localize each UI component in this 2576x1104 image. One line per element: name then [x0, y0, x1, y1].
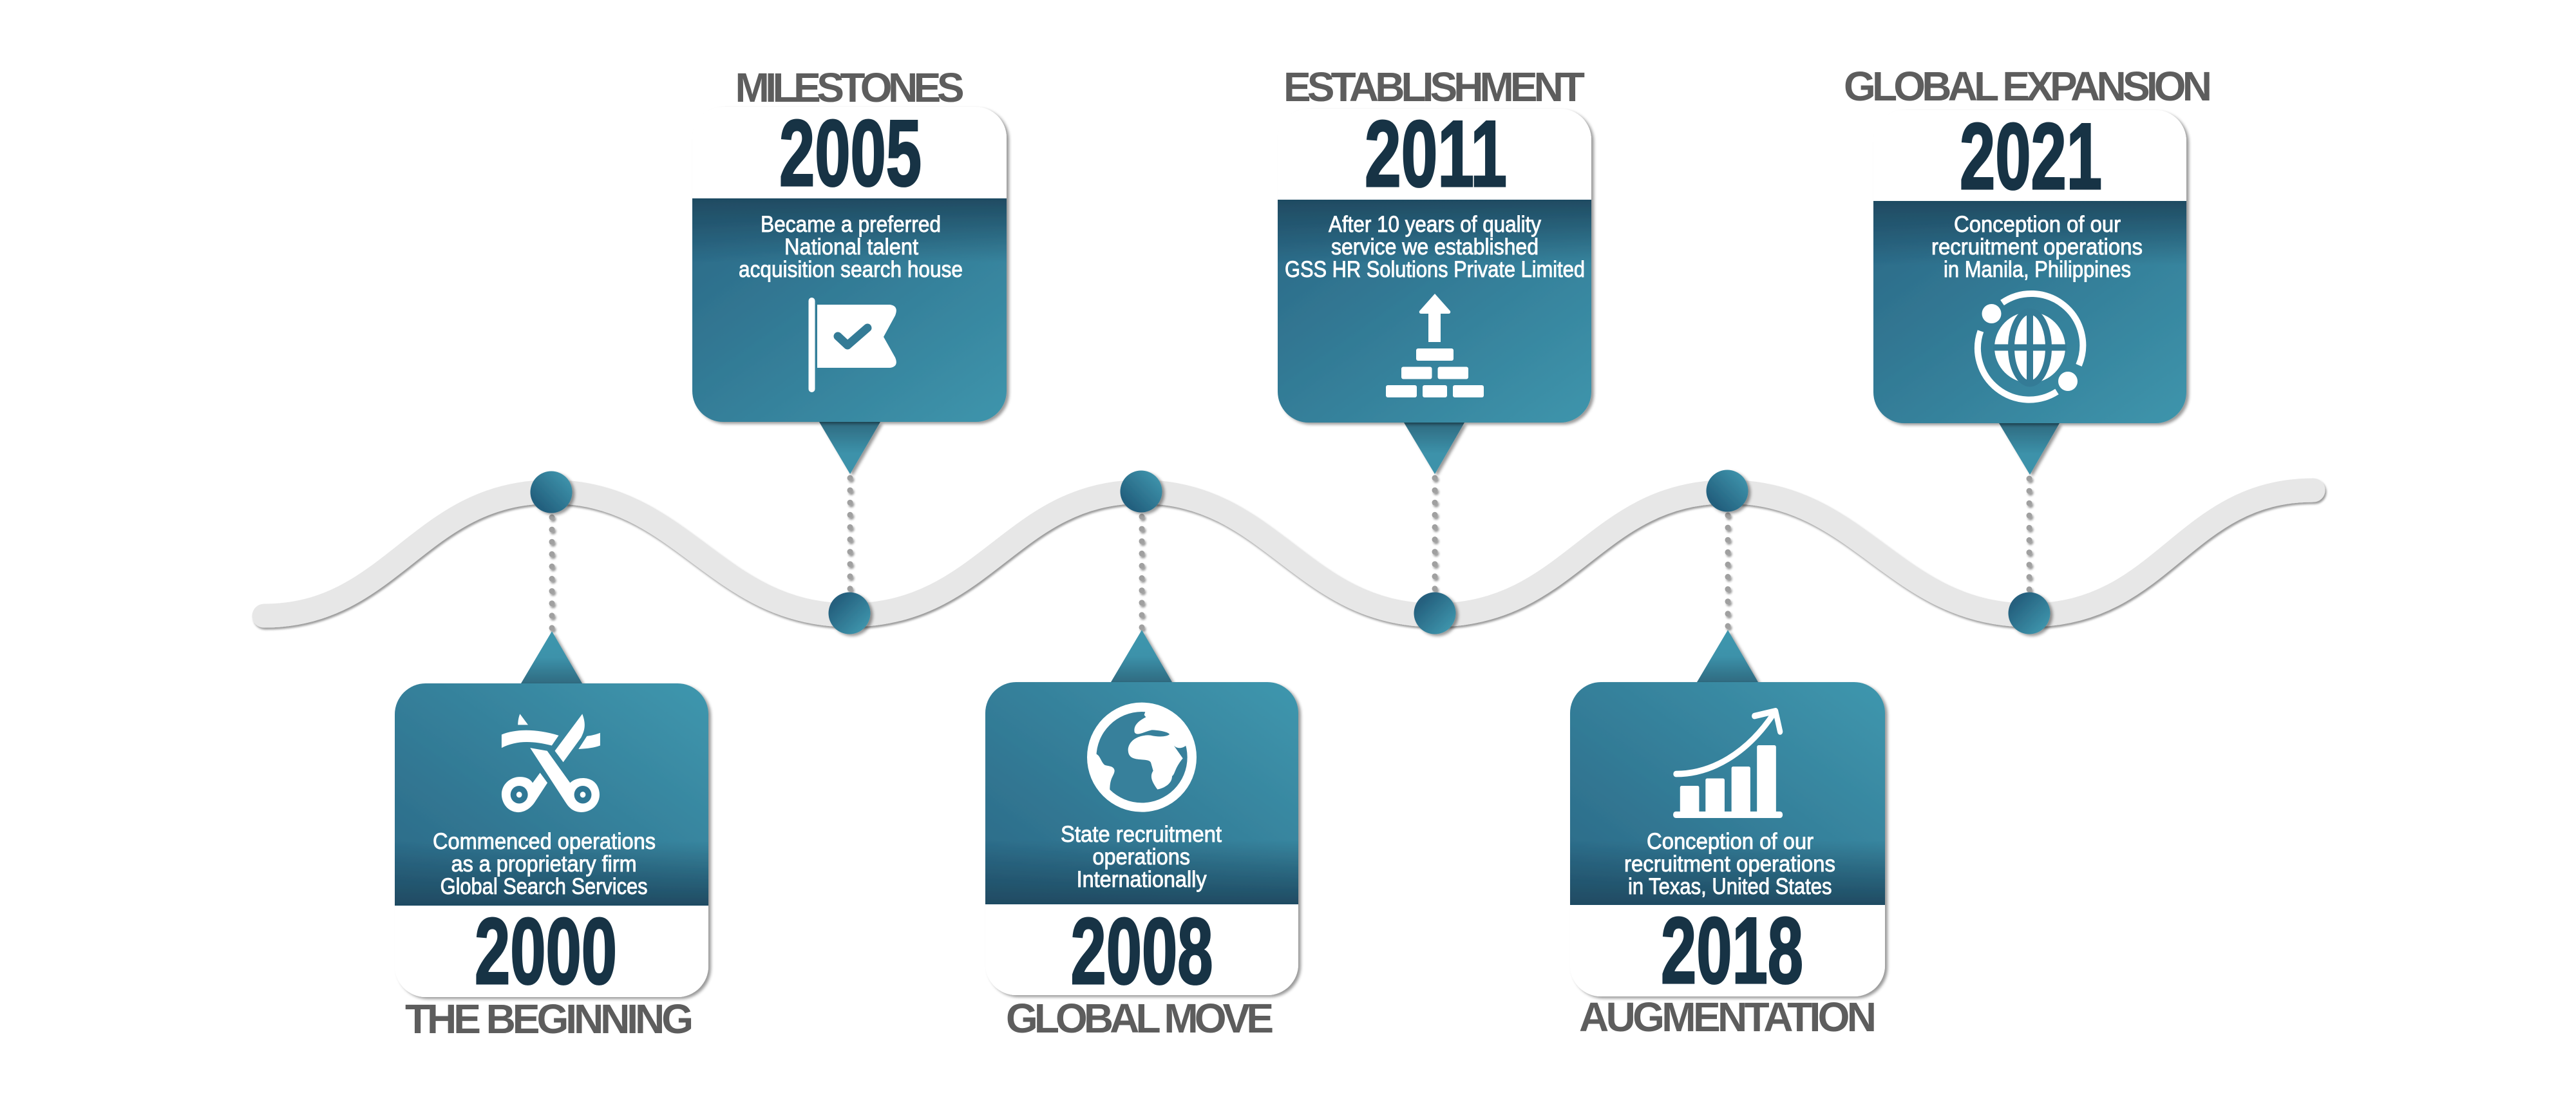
- description: State recruitment: [1061, 822, 1222, 847]
- card: [692, 107, 1007, 422]
- panel: 2000 the beginning: [395, 631, 708, 1042]
- description: service we established: [1331, 234, 1539, 260]
- panel: 2018 augmentation: [1570, 630, 1885, 1040]
- heading: MILESTONES: [735, 64, 965, 111]
- icon: growth chart: [1673, 711, 1783, 818]
- heading: GLOBAL MOVE: [1006, 995, 1274, 1042]
- card: [1570, 682, 1885, 996]
- description: as a proprietary firm: [451, 852, 637, 877]
- panel: 2021 global expansion: [1844, 63, 2212, 475]
- description: Internationally: [1077, 867, 1207, 892]
- pointer: [1111, 630, 1172, 682]
- description: in Manila, Philippines: [1944, 257, 2131, 282]
- description: operations: [1092, 844, 1190, 870]
- description: [739, 212, 963, 282]
- dotted connectors: [552, 478, 2029, 630]
- icon: arrow over bricks: [1386, 294, 1484, 397]
- timeline nodes: [531, 470, 2050, 634]
- description: acquisition search house: [739, 257, 963, 282]
- description: [1624, 829, 1835, 899]
- heading: GLOBAL EXPANSION: [1844, 63, 2212, 109]
- year: 2011: [1365, 101, 1507, 206]
- year: 2000: [475, 899, 617, 1004]
- icon: globe with orbit: [1978, 294, 2083, 400]
- description: National talent: [784, 234, 918, 260]
- description: Global Search Services: [440, 874, 648, 899]
- icon: flag with check: [809, 298, 896, 392]
- description: [433, 829, 656, 899]
- pointer: [1697, 630, 1758, 682]
- year: 2008: [1070, 899, 1213, 1004]
- description: [1931, 212, 2143, 282]
- pointer: [819, 422, 880, 474]
- description: recruitment operations: [1931, 234, 2143, 260]
- description: [1285, 212, 1585, 282]
- panel: 2011 establishment: [1278, 64, 1591, 474]
- description: in Texas, United States: [1628, 874, 1832, 899]
- description: GSS HR Solutions Private Limited: [1285, 257, 1585, 282]
- pointer: [521, 631, 582, 683]
- heading: AUGMENTATION: [1579, 994, 1877, 1040]
- description: Became a preferred: [761, 212, 941, 237]
- year: 2021: [1960, 104, 2102, 209]
- description: Commenced operations: [433, 829, 656, 854]
- icon: scissors cutting ribbon: [502, 714, 600, 812]
- description: After 10 years of quality: [1329, 212, 1541, 237]
- description: [1061, 822, 1222, 892]
- card: [1873, 110, 2186, 423]
- year: 2005: [779, 100, 922, 205]
- panel: 2005 milestones: [692, 64, 1007, 474]
- description: Conception of our: [1954, 212, 2121, 237]
- card: [985, 682, 1298, 995]
- pointer: [1404, 423, 1464, 474]
- heading: THE BEGINNING: [405, 996, 694, 1042]
- year: 2018: [1661, 898, 1803, 1003]
- pointer: [1999, 423, 2060, 475]
- timeline wave: [264, 490, 2313, 616]
- panel: 2008 global move: [985, 630, 1298, 1042]
- card: [1278, 109, 1591, 423]
- description: Conception of our: [1647, 829, 1814, 854]
- icon: globe: [1087, 703, 1197, 812]
- heading: ESTABLISHMENT: [1283, 64, 1585, 110]
- description: recruitment operations: [1624, 852, 1835, 877]
- card: [395, 683, 708, 997]
